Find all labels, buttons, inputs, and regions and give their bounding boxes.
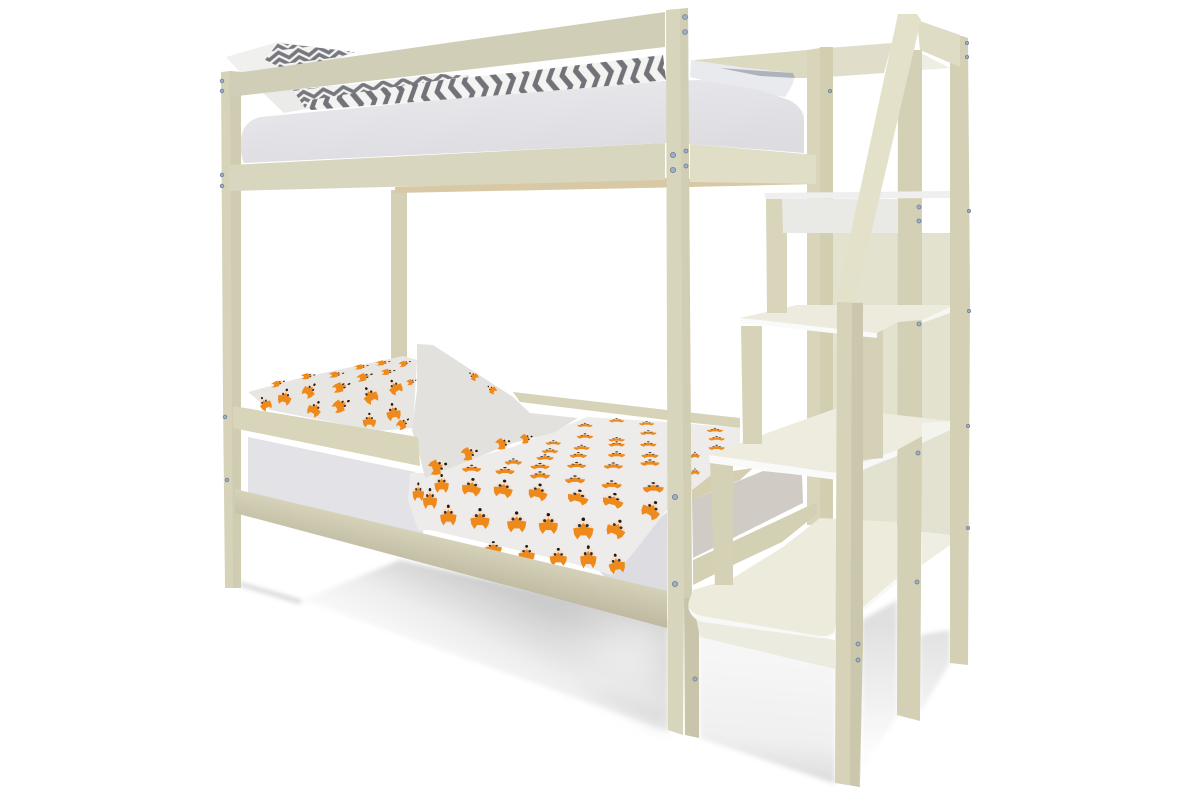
top guard rail — [229, 12, 665, 97]
third tread — [709, 408, 950, 473]
fox duvet — [408, 417, 740, 575]
staircase — [688, 14, 970, 787]
lower guard rail — [233, 406, 420, 466]
top tread — [764, 191, 950, 199]
upper side rail front — [229, 143, 665, 191]
rear stair rail — [828, 43, 892, 77]
star pillow right — [690, 60, 794, 97]
post under second tread — [741, 326, 762, 444]
top tread fascia — [782, 199, 898, 233]
fox prints — [256, 358, 725, 575]
bottom tread right part — [922, 532, 950, 565]
bottom tread — [688, 518, 897, 637]
shadow under bed — [302, 560, 668, 731]
chevron blanket upper fold — [293, 74, 470, 108]
second tread — [740, 305, 950, 333]
rear posts — [807, 48, 820, 525]
upper frame rails — [229, 12, 816, 193]
post lower segment — [684, 598, 699, 738]
screws — [220, 15, 971, 681]
top connector rail — [917, 20, 960, 67]
fox pillow — [248, 356, 417, 431]
lower mattress right — [600, 512, 667, 596]
lower bed — [233, 344, 817, 628]
upper bedding — [226, 42, 804, 163]
newel post — [835, 302, 863, 787]
rear left post — [391, 190, 407, 360]
bottom tread fascia — [695, 613, 835, 669]
upper side rail right — [690, 144, 816, 184]
left post — [221, 71, 241, 588]
star pillow lower left — [263, 86, 311, 113]
second-tier inner post — [863, 328, 883, 460]
rear lower side rail — [693, 502, 817, 585]
floor shadow — [240, 560, 950, 784]
middle stair post — [897, 50, 922, 721]
lower mattress left — [248, 437, 425, 545]
front post — [666, 8, 699, 738]
strip under upper bed — [395, 178, 816, 193]
side mattress behind the stairs — [692, 471, 803, 558]
upper mattress — [241, 80, 804, 163]
duvet fold — [412, 344, 578, 478]
rear lower bed rail — [513, 392, 740, 428]
post under top tread — [766, 199, 787, 313]
side rail above side mattress — [692, 468, 753, 500]
lower long rail — [235, 489, 667, 628]
handrail — [837, 14, 921, 302]
right rear stair post — [950, 36, 970, 665]
star pillow upper left — [226, 42, 355, 75]
rear upper rail — [695, 50, 807, 78]
chevron blanket — [300, 55, 666, 110]
post under third tread — [710, 463, 733, 585]
rear frame — [391, 43, 892, 525]
shadow under stairs — [699, 630, 835, 784]
back panels — [833, 233, 950, 430]
